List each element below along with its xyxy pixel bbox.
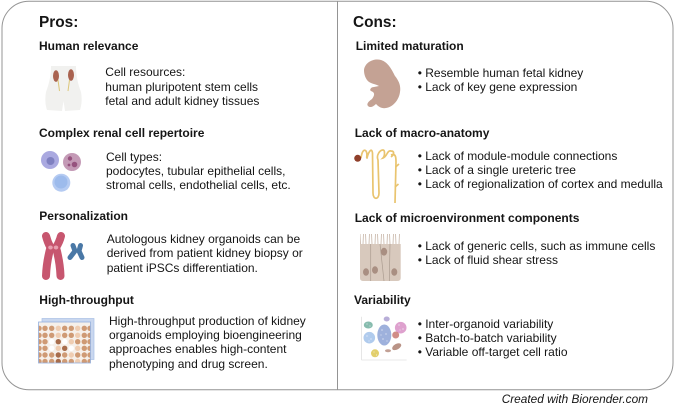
heading: Lack of microenvironment components: Lack of microenvironment components [355, 211, 579, 225]
icon: well plate [38, 318, 94, 364]
icon: chromosomes [42, 232, 84, 280]
heading: High-throughput: High-throughput [39, 293, 134, 307]
text: variability list: • Batch-to-batch variability [418, 331, 557, 345]
text: macro-anatomy list: • Lack of module-module connections [418, 148, 617, 162]
icon: human torso with kidneys [46, 66, 82, 111]
text: cell types [106, 150, 291, 192]
text: macro-anatomy list: • Lack of a single ureteric tree [418, 163, 576, 177]
text: limited maturation list [418, 66, 584, 94]
icon: three cells [41, 151, 81, 192]
text: limited maturation list: • Lack of key gene expression [418, 80, 577, 94]
text: cell resources: Cell resources: [105, 65, 185, 79]
icon: nephron [354, 149, 400, 203]
text: high-throughput description: approaches enables high-content [109, 342, 286, 356]
text: high-throughput description: phenotyping and drug screen. [109, 357, 268, 371]
heading: Personalization: Personalization [39, 209, 128, 223]
text: cell resources: human pluripotent stem cells [105, 80, 258, 94]
heading: Lack of macro-anatomy: Lack of macro-anatomy [355, 126, 489, 140]
heading: Limited maturation: Limited maturation [356, 39, 464, 53]
text: autologous organoids: patient iPSCs differentiation. [107, 261, 258, 275]
text: autologous organoids: Autologous kidney organoids can be [107, 232, 300, 246]
text: cell types: Cell types: [106, 150, 162, 164]
text: limited maturation list: • Resemble human fetal kidney [418, 66, 583, 80]
chart: single-cell scatter plot [362, 316, 406, 360]
heading: Complex renal cell repertoire: Complex renal cell repertoire [39, 126, 204, 140]
heading: Cons: Cons: [353, 14, 397, 31]
text: variability list: • Variable off-target cell ratio [418, 345, 568, 359]
heading: Pros: Pros: [39, 14, 78, 31]
text: high-throughput description: organoids employing bioengineering [109, 328, 302, 342]
text: autologous organoids [106, 232, 303, 275]
text: variability list: • Inter-organoid variability [418, 317, 553, 331]
heading: Variability: Variability [354, 293, 411, 307]
text: cell types: stromal cells, endothelial cells, etc. [106, 178, 291, 192]
text: autologous organoids: derived from patient kidney biopsy or [107, 246, 303, 260]
text: high-throughput description: High-throughput production of kidney [109, 314, 306, 328]
text: cell resources [105, 65, 259, 108]
text: variability list [418, 317, 568, 359]
text: high-throughput description [109, 314, 306, 371]
panel: pros [38, 14, 306, 371]
text: macro-anatomy list [418, 148, 663, 191]
text: microenvironment list: • Lack of generic cells, such as immune cells [418, 239, 655, 253]
icon: human embryo [364, 60, 400, 108]
text: microenvironment list [418, 239, 655, 267]
icon: epithelial cells [360, 234, 401, 281]
text: cell resources: fetal and adult kidney tissues [105, 94, 259, 108]
text: macro-anatomy list: • Lack of regionalization of cortex and medulla [418, 177, 663, 191]
text: cell types: podocytes, tubular epithelial cells, [106, 164, 285, 178]
panel: cons [353, 14, 663, 360]
text: microenvironment list: • Lack of fluid shear stress [418, 253, 558, 267]
heading: Human relevance: Human relevance [39, 39, 138, 53]
credit: Created with Biorender.com: Created with Biorender.com [502, 392, 648, 406]
